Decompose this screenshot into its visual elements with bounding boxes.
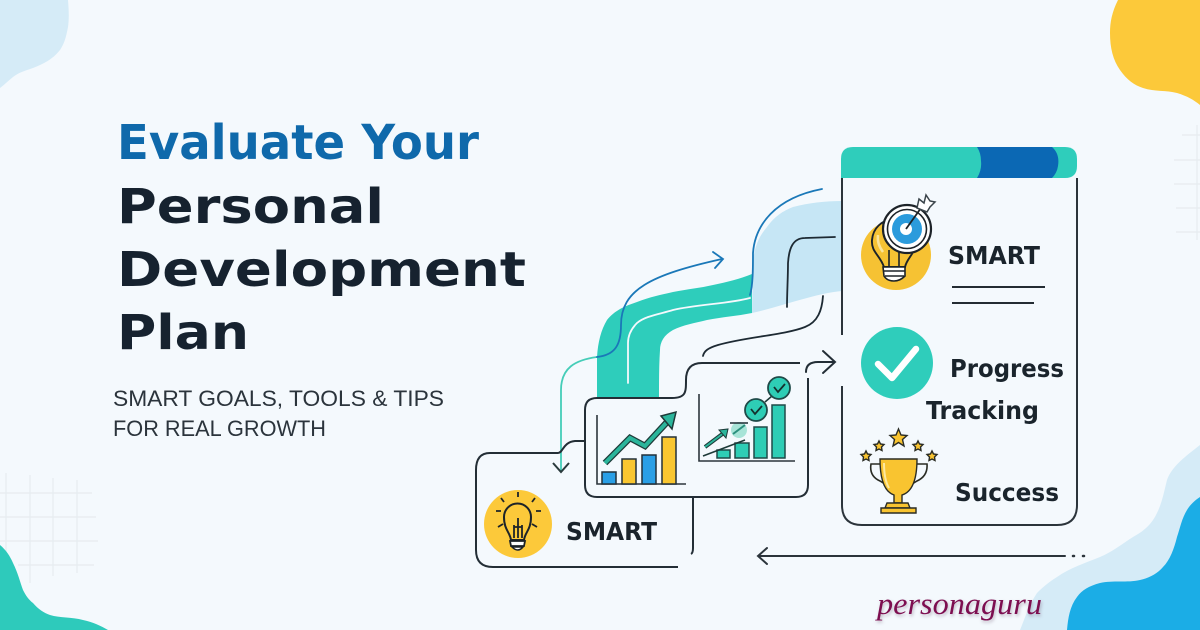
connector: dark curve [703, 296, 823, 356]
card outline [842, 178, 1077, 525]
title line: Personal: Personal [117, 179, 384, 235]
connector: blue upper section [597, 259, 722, 357]
title line: Evaluate Your: Evaluate Your [117, 115, 479, 171]
title line: Development: Development [117, 242, 526, 298]
label: Success: Success [955, 478, 1059, 507]
watermark: personaguru: personaguru [875, 586, 1042, 621]
blob: top-left light blue [0, 0, 69, 88]
flow ribbons and connector lines [561, 189, 842, 470]
ribbon: light blue [752, 201, 842, 313]
connector: blue top line [750, 189, 822, 295]
chart: rising bars [597, 412, 686, 484]
blob: top-right yellow [1110, 0, 1200, 105]
connector: white line in ribbon [628, 298, 750, 383]
subtitle line 1: SMART GOALS, TOOLS & TIPS [113, 386, 444, 411]
blob: bottom-left teal [0, 545, 108, 630]
label: SMART: SMART [566, 517, 657, 546]
ribbon: teal [597, 274, 752, 398]
label: SMART: SMART [948, 241, 1040, 270]
panel: SMART card [476, 441, 693, 567]
label: Progress: Progress [950, 354, 1064, 383]
label: Tracking: Tracking [926, 396, 1039, 425]
text placeholder lines [952, 287, 1045, 303]
title line: Plan: Plan [117, 305, 249, 361]
icon: check circle [861, 327, 933, 399]
connector: teal to blue arrow down [561, 259, 722, 470]
blob: bottom-right blue [1067, 497, 1200, 630]
card header bar [841, 147, 1077, 178]
subtitle [113, 386, 444, 441]
title [117, 115, 526, 361]
icon: light bulb [484, 490, 552, 558]
icon: bulb with target [861, 195, 935, 290]
arrow: to right card [806, 351, 835, 373]
arrowhead: blue [713, 252, 723, 268]
icon: trophy with stars [861, 429, 937, 513]
connector: teal lower section [561, 357, 597, 470]
chart: bars with check marks [699, 377, 795, 461]
connector: dark line in light ribbon [787, 237, 835, 307]
subtitle line 2: FOR REAL GROWTH [113, 416, 326, 441]
card outline [476, 441, 693, 567]
panel: right checklist card [841, 147, 1077, 525]
arrowhead: teal down [553, 463, 569, 472]
blob: bottom-right light blue [1020, 445, 1200, 630]
arrow: return line [758, 548, 1084, 564]
card outline [585, 363, 808, 497]
panel: charts card [585, 351, 835, 497]
